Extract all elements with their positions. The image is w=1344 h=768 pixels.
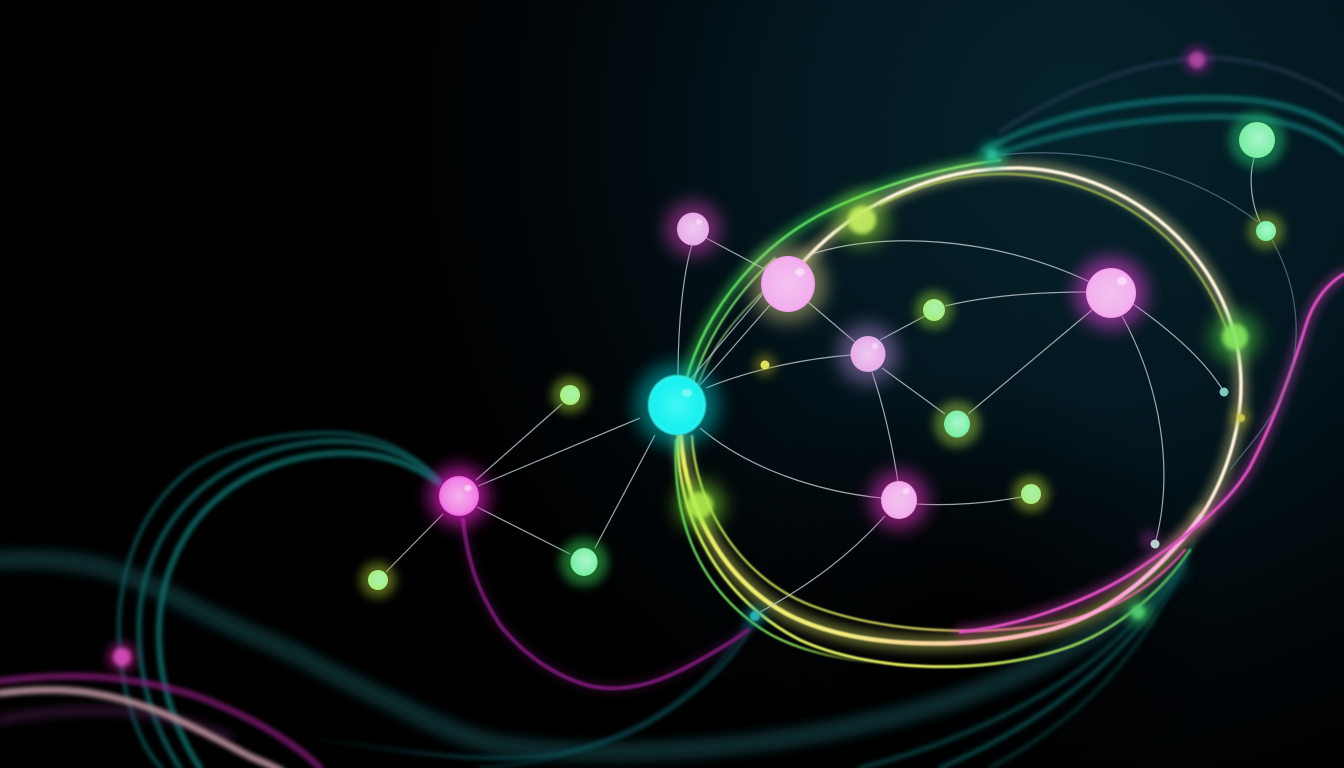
node: mint centre lower xyxy=(934,401,980,447)
bottom-left pink and cream curves xyxy=(0,676,320,768)
node: pink large right xyxy=(1075,257,1147,329)
node: mint top right xyxy=(1229,112,1285,168)
yellow-green lower strands xyxy=(676,436,1201,667)
node: hot pink left xyxy=(430,467,488,525)
node: pink lower xyxy=(870,471,928,529)
node: green left upper xyxy=(552,377,588,413)
magenta sweep to right edge xyxy=(960,274,1344,632)
node: green left lower xyxy=(560,538,608,586)
node: green far left xyxy=(360,562,396,598)
soft blurred accent nodes xyxy=(107,46,1259,672)
green nodes xyxy=(360,112,1285,598)
magenta curve from left node to teal node xyxy=(463,520,748,688)
node: pale centre xyxy=(838,324,898,384)
node: green lower right xyxy=(1013,476,1049,512)
node: pale pink top xyxy=(666,202,720,256)
cream top arc xyxy=(804,168,1241,516)
node: green centre upper xyxy=(915,291,953,329)
pink nodes xyxy=(430,202,1147,529)
main glowing ring xyxy=(676,160,1344,667)
outer green strands xyxy=(686,160,1000,385)
node: green top right small xyxy=(1248,213,1284,249)
network connectors xyxy=(386,153,1296,612)
node: pink large upper xyxy=(750,246,826,322)
node: cyan hub xyxy=(635,363,719,447)
